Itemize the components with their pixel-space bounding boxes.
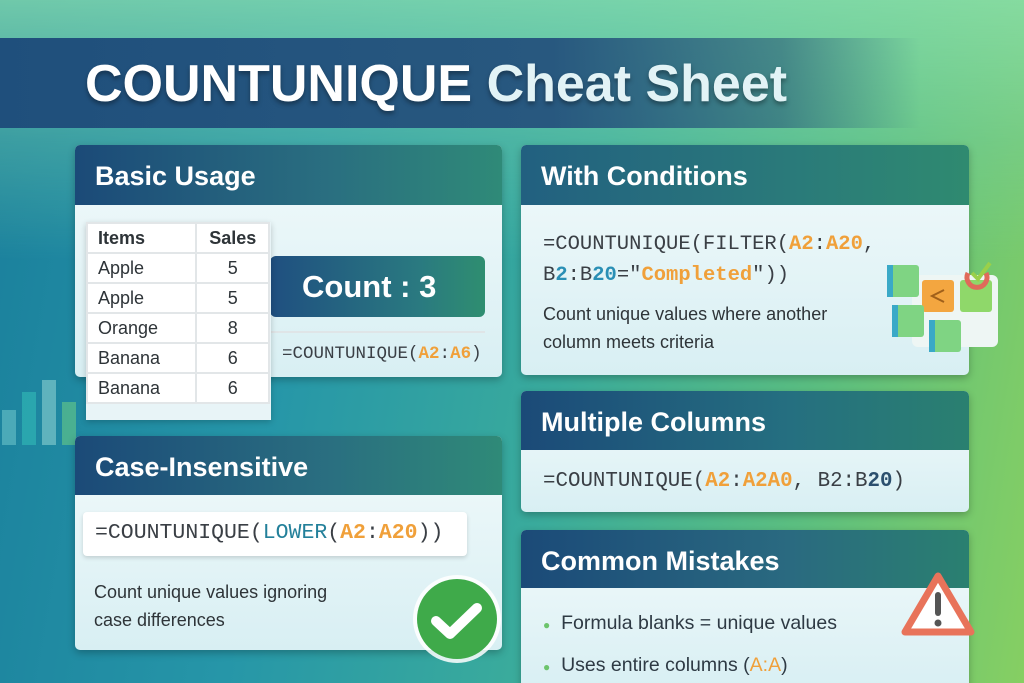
panel: with conditions — [521, 145, 969, 375]
formula: lower: =COUNTUNIQUE(LOWER(A2:A20)) — [95, 521, 443, 545]
data table — [86, 222, 271, 420]
description: column meets criteria — [543, 332, 714, 352]
data table: Orange — [98, 318, 158, 338]
description: case differences — [94, 610, 225, 630]
panel: multiple columns — [521, 391, 969, 512]
formula: lower — [83, 512, 467, 556]
icon: warning triangle — [902, 572, 974, 636]
data table: Apple — [98, 258, 144, 278]
title band — [0, 38, 920, 128]
data table: Banana — [98, 348, 160, 368]
panel: basic usage — [75, 145, 502, 377]
data table: 6 — [228, 348, 238, 368]
bullet list — [543, 612, 837, 676]
count box: Count : 3 — [302, 269, 436, 304]
data table: 6 — [228, 378, 238, 398]
bullet list: ● Formula blanks = unique values — [543, 612, 837, 634]
description: Count unique values ignoring — [94, 582, 327, 602]
data table: Apple — [98, 288, 144, 308]
heading: with conditions: With Conditions — [541, 161, 748, 191]
bullet list: ● Uses entire columns (A:A) — [543, 654, 788, 676]
icon: check mark — [413, 575, 501, 663]
icon: filter cubes — [887, 262, 998, 352]
heading: common mistakes: Common Mistakes — [541, 546, 780, 576]
count box — [270, 256, 485, 317]
heading: with conditions — [521, 145, 969, 205]
panel: case-insensitive — [75, 436, 502, 650]
heading: basic usage: Basic Usage — [95, 161, 256, 191]
description — [94, 582, 327, 630]
formula: filter — [543, 233, 875, 287]
data table: 5 — [228, 288, 238, 308]
heading: case-insensitive — [75, 436, 502, 495]
formula: filter: B2:B20="Completed")) — [543, 264, 789, 287]
description: Count unique values where another — [543, 304, 827, 324]
title: COUNTUNIQUE Cheat Sheet — [85, 55, 787, 113]
heading: common mistakes — [521, 530, 969, 588]
heading: basic usage — [75, 145, 502, 205]
data table: Banana — [98, 378, 160, 398]
heading: case-insensitive: Case-Insensitive — [95, 452, 308, 482]
heading: multiple columns: Multiple Columns — [541, 407, 766, 437]
formula: multiple: =COUNTUNIQUE(A2:A2A0, B2:B20) — [543, 470, 905, 493]
background bar chart — [2, 380, 76, 445]
panel: common mistakes — [521, 530, 969, 683]
formula: basic: =COUNTUNIQUE(A2:A6) — [282, 344, 482, 364]
data table: Sales — [209, 228, 256, 248]
formula: filter: =COUNTUNIQUE(FILTER(A2:A20, — [543, 233, 875, 256]
data table: Items — [98, 228, 145, 248]
heading: multiple columns — [521, 391, 969, 450]
description — [543, 304, 827, 352]
data table: 5 — [228, 258, 238, 278]
data table: 8 — [228, 318, 238, 338]
